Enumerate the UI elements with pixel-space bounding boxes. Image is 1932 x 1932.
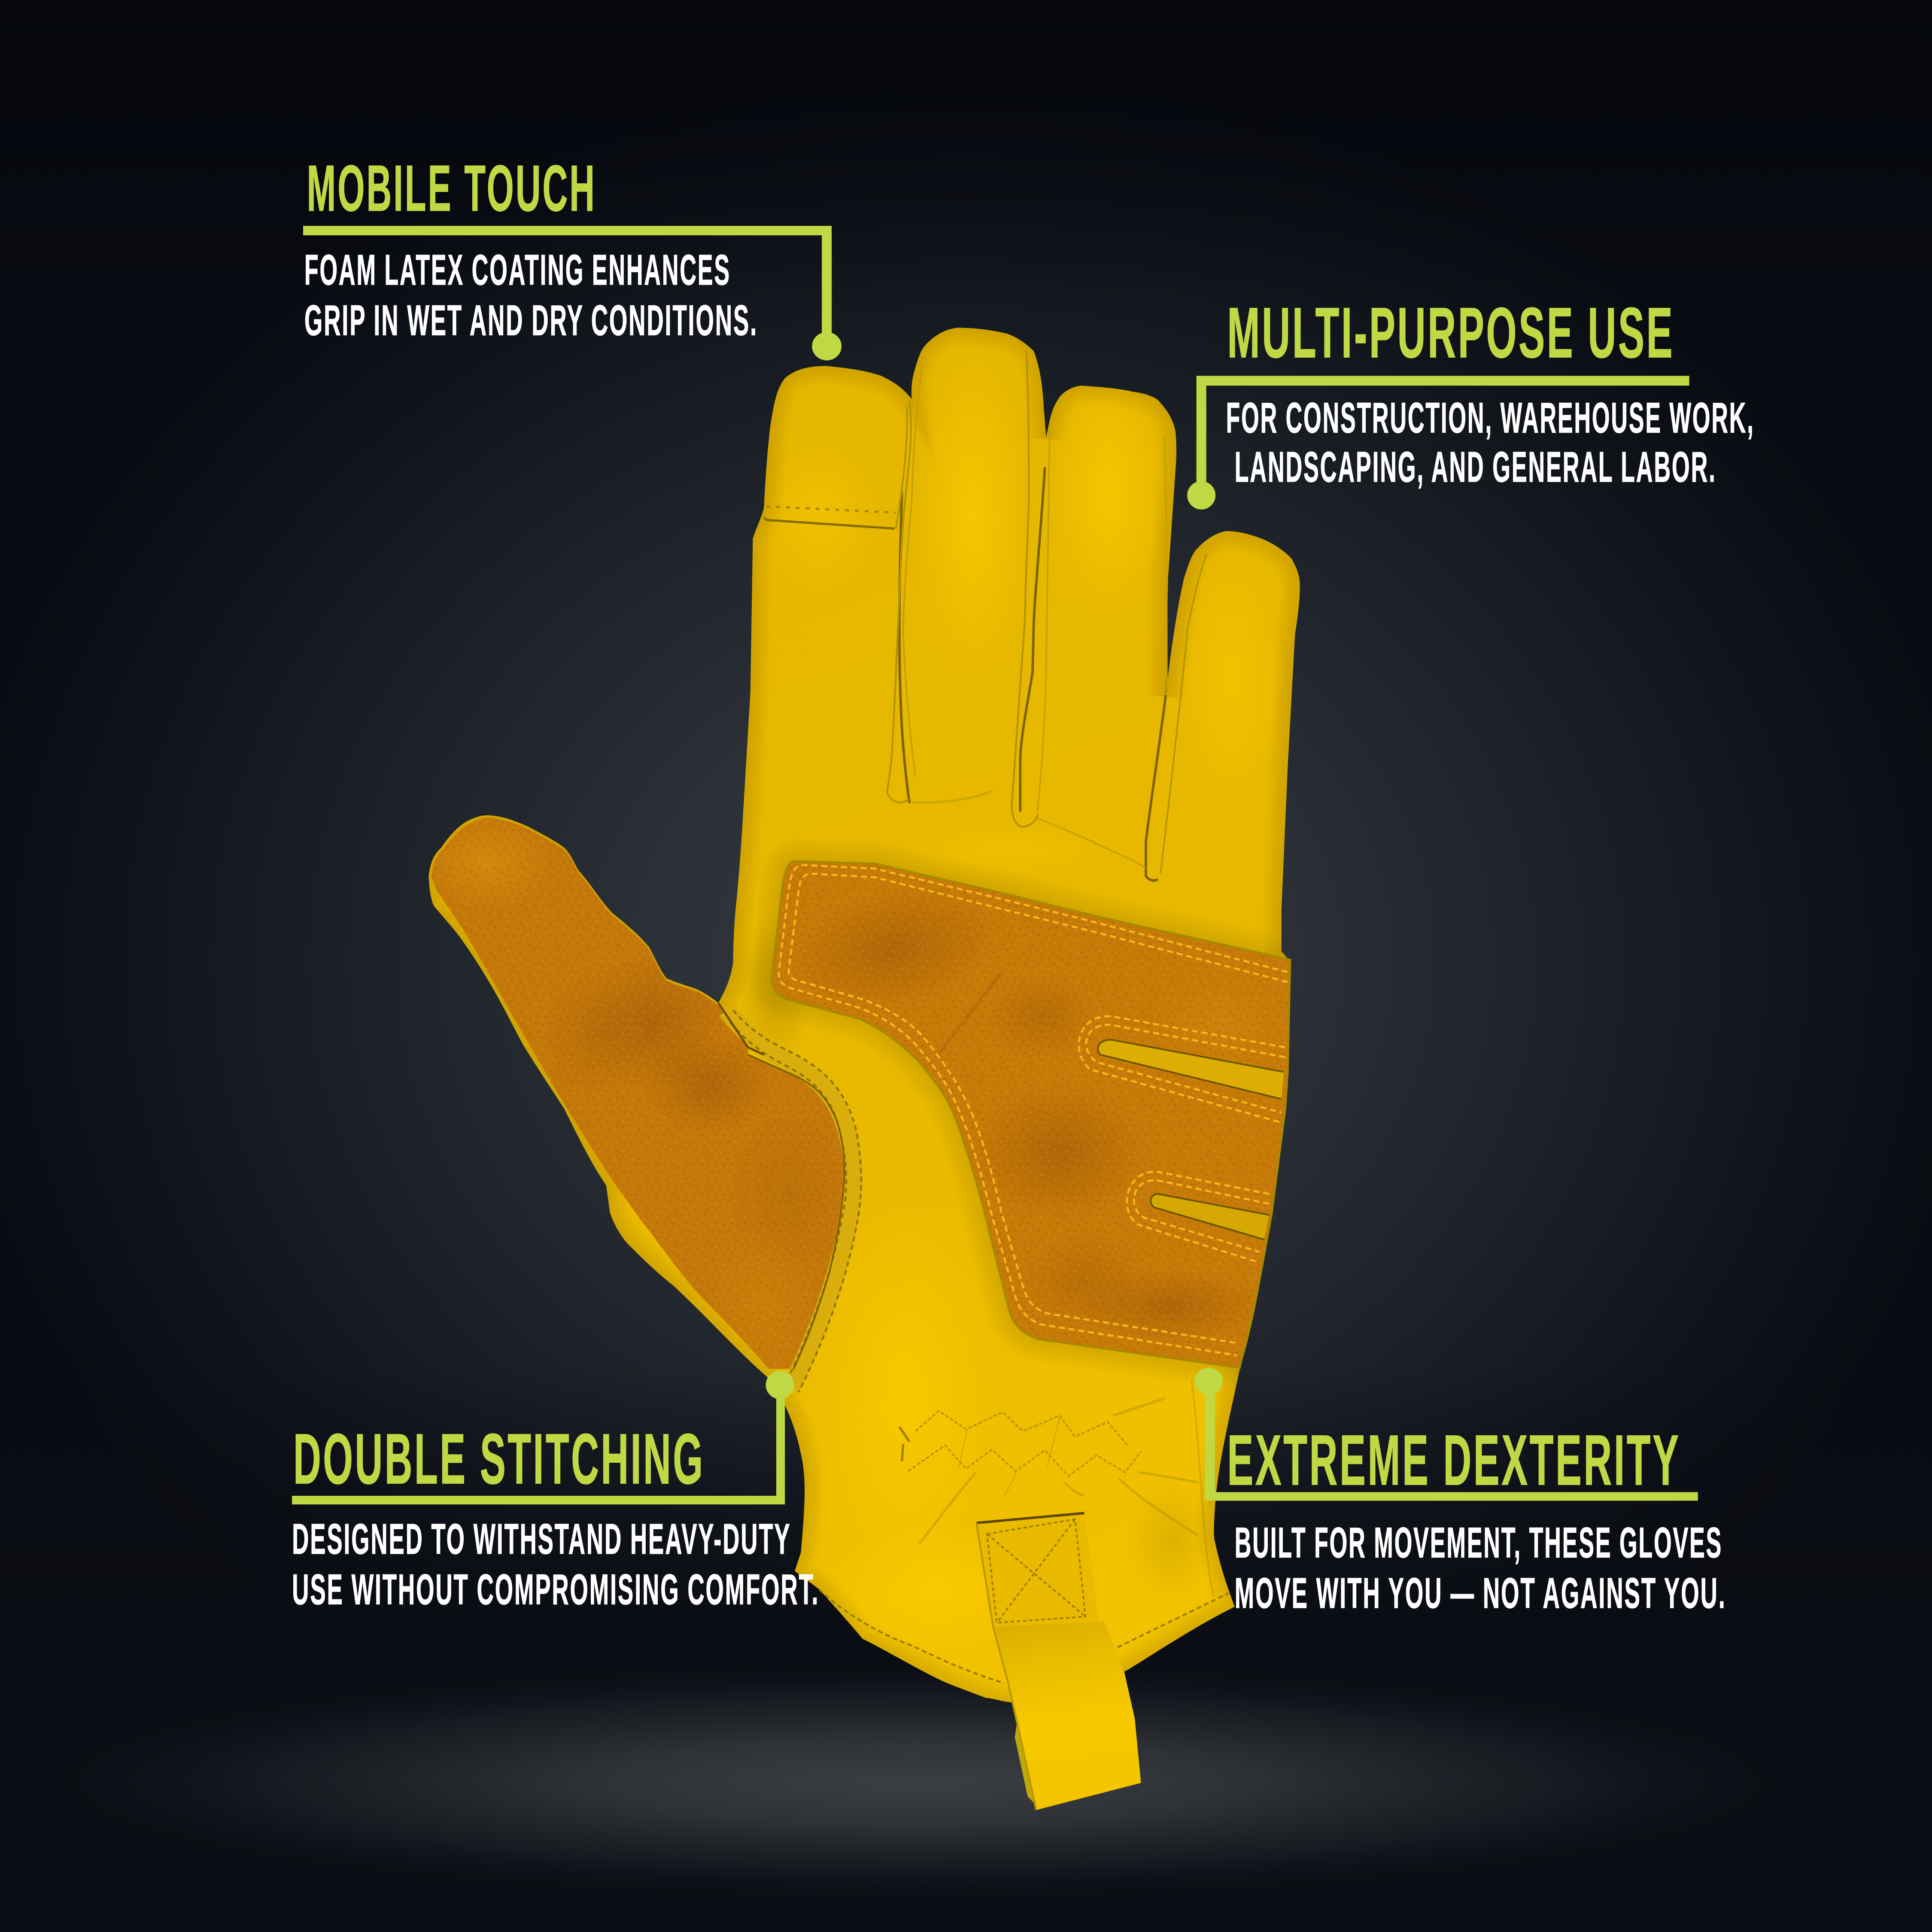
body text: GRIP IN WET AND DRY CONDITIONS. [304, 297, 758, 345]
leader line and dot [303, 226, 841, 360]
palm suede patch [764, 850, 1300, 1380]
glove [419, 328, 1300, 1810]
body text: FOAM LATEX COATING ENHANCES [304, 246, 731, 294]
thumb suede [419, 801, 863, 1392]
callout: multi-purpose use [1187, 293, 1755, 510]
glove leather body [429, 328, 1300, 1703]
leader line and dot [292, 1371, 794, 1504]
callout: mobile touch [303, 152, 841, 360]
palm slot upper [1079, 1016, 1285, 1122]
thumb stitch band [718, 1003, 861, 1392]
callout: extreme dexterity [1194, 1368, 1726, 1617]
strap tab [993, 1622, 1141, 1810]
wrist strap [976, 1513, 1141, 1810]
body text [1226, 394, 1755, 491]
wrist ruffle stitching [899, 1398, 1198, 1544]
body text [1235, 1519, 1726, 1617]
palm patch edge and stitching [772, 861, 1290, 1368]
body text [304, 246, 758, 345]
leather shading [429, 328, 1300, 1703]
finger seams [887, 351, 1206, 881]
strap back side [1015, 1709, 1060, 1806]
body text: DESIGNED TO WITHSTAND HEAVY-DUTY [292, 1515, 791, 1563]
hem stitching [819, 1380, 1228, 1683]
strap stitched box [976, 1513, 1099, 1626]
callout: double stitching [292, 1371, 819, 1614]
heading: double stitching: DOUBLE STITCHING [293, 1419, 705, 1499]
fingertip touch patch [764, 407, 907, 529]
leader line and dot [1187, 376, 1689, 510]
body text [292, 1515, 819, 1614]
heading: mobile touch: MOBILE TOUCH [307, 152, 596, 225]
leader line and dot [1194, 1368, 1698, 1501]
palm slot lower [1127, 1172, 1269, 1262]
body text: USE WITHOUT COMPROMISING COMFORT. [292, 1566, 819, 1614]
